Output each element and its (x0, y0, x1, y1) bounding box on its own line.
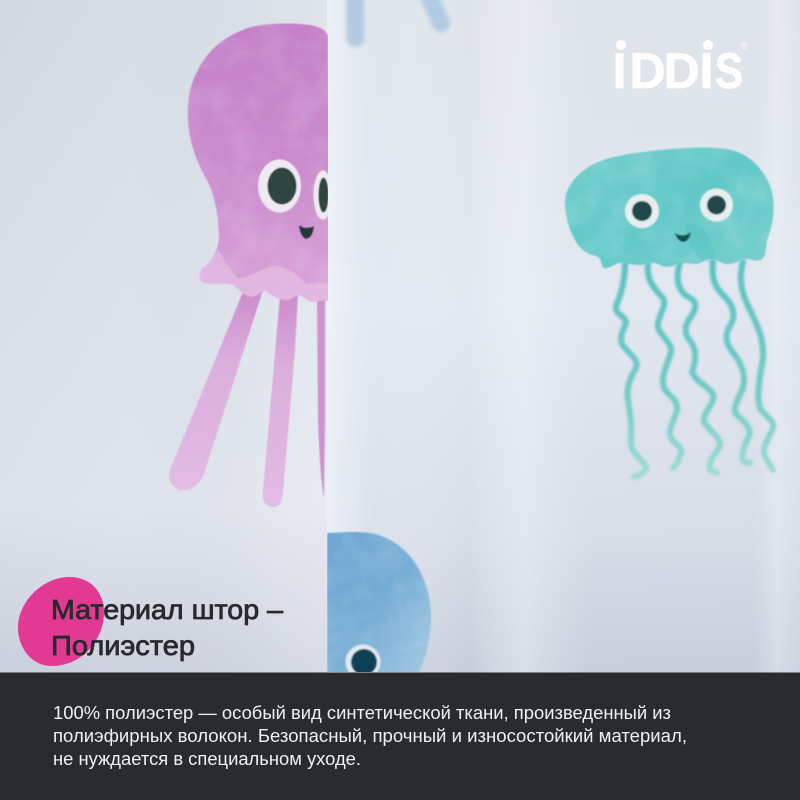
left curtain panel (0, 0, 330, 673)
illustration: teal jellyfish (565, 147, 774, 477)
logo: IDDIS: S (715, 43, 743, 99)
title (51, 594, 283, 661)
title: Полиэстер (51, 630, 195, 661)
title: Материал штор – (51, 594, 283, 625)
bottom dark bar with description (0, 672, 800, 800)
description text: не нуждается в специальном уходе. (53, 749, 361, 769)
description text: 100% полиэстер — особый вид синтетической ткани, произведенный из (53, 703, 671, 723)
description text: полиэфирных волокон. Безопасный, прочный и износостойкий материал, (53, 726, 687, 746)
right curtain panel (327, 0, 800, 673)
pink accent blob (18, 577, 104, 666)
logo: IDDIS: IDDI (612, 43, 713, 99)
logo: IDDIS: ® (741, 41, 748, 51)
illustration: blue jellyfish (327, 532, 431, 680)
illustration: blue jellyfish legs (355, 0, 441, 38)
description text (53, 703, 687, 769)
illustration: purple jellyfish (169, 23, 332, 507)
